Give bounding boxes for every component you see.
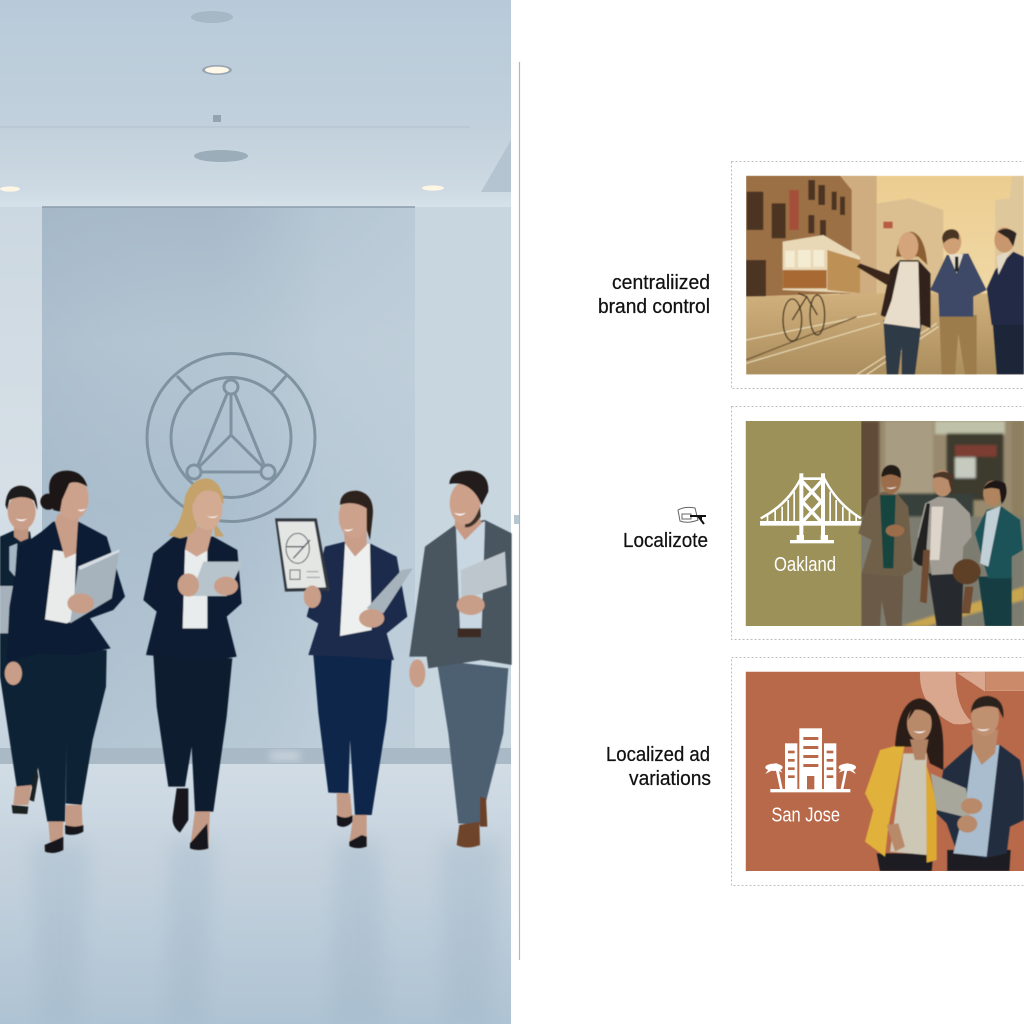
row 1: centralized brand control: [598, 162, 1024, 388]
terracotta background: [746, 672, 1024, 871]
panel: office hallway photo: [0, 0, 512, 1024]
person: far left woman: [0, 486, 38, 814]
divider notch: [514, 515, 519, 524]
hallway walls: [0, 207, 511, 764]
divider line: [518, 62, 520, 960]
olive panel: [746, 421, 861, 626]
row 2 photo: Oakland street: [746, 421, 1024, 626]
icon: small key and car sketch: [678, 507, 706, 524]
row 2 label: [623, 507, 708, 552]
floor reflections: [30, 840, 500, 1024]
row 3: localized San Jose ad: [606, 658, 1024, 886]
row 3 dashed frame: [732, 658, 1024, 886]
person: man in grey suit: [409, 471, 512, 847]
row 1 label: brand control: [598, 295, 710, 318]
city name: Oakland: [774, 553, 836, 576]
team of five walking: [0, 471, 512, 853]
person: man in brown jacket: [858, 465, 913, 626]
person: woman in plaid shirt: [913, 470, 981, 626]
row 3 label: Localized ad: [606, 743, 710, 766]
row 3 photo: San Jose ad: [746, 672, 1024, 871]
person: woman in teal blazer: [975, 481, 1023, 626]
row 1 photo: cable car street scene: [746, 176, 1024, 375]
city name: San Jose: [771, 804, 840, 827]
person: woman with folder: [5, 471, 125, 853]
row 2 dashed frame: [732, 406, 1024, 640]
person: woman in yellow cardigan: [865, 698, 943, 871]
icon: city buildings and palms: [765, 728, 856, 792]
row 1 label: [598, 271, 710, 318]
person: woman holding tablet sketch: [275, 491, 413, 848]
decorative circle shapes: [920, 672, 1024, 724]
person: blonde woman with tablet: [143, 478, 243, 850]
row 3 label: [606, 743, 711, 790]
person: woman in dark blazer with tablet: [931, 696, 1024, 871]
row 1 label: centraliized: [612, 271, 710, 294]
row 3 label: variations: [629, 767, 711, 790]
wall logo: [147, 354, 315, 522]
floor: [0, 764, 511, 1024]
ceiling: [0, 0, 511, 207]
icon: bridge: [760, 473, 862, 543]
row 1 dashed frame: [732, 162, 1024, 388]
label text: Localizote: [623, 529, 708, 552]
row 2: localized Oakland ad: [623, 406, 1024, 640]
